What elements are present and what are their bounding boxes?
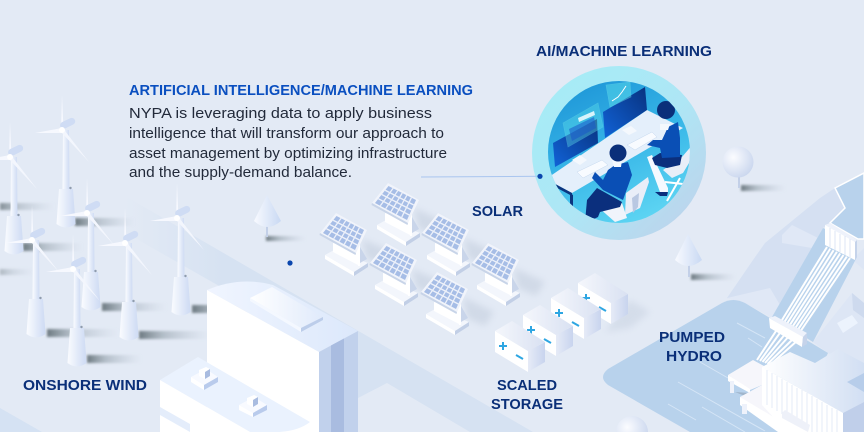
wind turbine 4 — [98, 208, 152, 340]
right mountains — [813, 293, 864, 372]
turbine shadows — [0, 203, 262, 363]
wind turbine 7 — [46, 234, 100, 366]
monitor right — [603, 87, 647, 138]
panel: solar array — [320, 183, 545, 335]
lower platforms — [728, 360, 820, 432]
tree: cone — [254, 195, 306, 241]
office scene — [546, 82, 694, 222]
solar shadows — [362, 208, 545, 326]
solar panel — [372, 183, 420, 246]
penstock channel — [772, 228, 857, 342]
solar panel — [472, 243, 520, 306]
lake — [603, 300, 828, 432]
marker dot — [287, 260, 293, 266]
panel: AI illustration circle — [532, 66, 706, 240]
inner circle — [548, 81, 690, 223]
tree: round bottom — [616, 416, 648, 432]
panel: onshore wind farm — [0, 95, 262, 366]
label: pumped hydro — [659, 329, 725, 365]
outer circle — [532, 66, 706, 240]
battery 4 — [578, 273, 628, 324]
monitor left — [553, 119, 598, 167]
person 1 — [585, 144, 632, 222]
battery 2 — [523, 305, 573, 356]
powerhouse — [762, 349, 864, 432]
heading: artificial intelligence: ARTIFICIAL INTELLIGENCE/MACHINE LEARNING — [129, 83, 473, 99]
person 2 — [647, 101, 682, 196]
panel: scaled storage batteries — [495, 273, 650, 372]
person 1 chair — [598, 177, 649, 222]
body text — [129, 105, 447, 181]
connector line — [421, 174, 543, 179]
rooftop unit — [239, 395, 267, 417]
wind turbine 2 — [0, 122, 37, 254]
label: AI/machine learning: AI/MACHINE LEARNING — [536, 43, 712, 60]
label: scaled storage: SCALED — [497, 377, 557, 394]
keyboards — [577, 160, 608, 178]
low building — [160, 357, 310, 432]
battery shadow — [605, 300, 650, 332]
hologram right — [606, 82, 631, 107]
label: pumped hydro: HYDRO — [666, 348, 722, 365]
solar panel — [422, 213, 470, 276]
desk — [552, 110, 683, 206]
panel: pumped hydro — [603, 173, 864, 432]
wind turbine 5 — [150, 183, 204, 316]
label: onshore wind: ONSHORE WIND — [23, 377, 147, 394]
tree: cone right — [675, 234, 736, 280]
person 2 chair — [663, 148, 690, 202]
body text: asset management by optimizing infrastructure — [129, 145, 447, 162]
label: scaled storage — [491, 377, 563, 413]
tall building — [207, 281, 358, 432]
solar panel — [370, 243, 418, 306]
wind turbine 1 — [35, 95, 89, 228]
tree: round — [722, 146, 786, 191]
label: pumped hydro: PUMPED — [659, 329, 725, 346]
solar panel — [420, 272, 469, 335]
battery 1 — [495, 321, 545, 372]
solar panel — [320, 213, 368, 276]
water ripples — [668, 323, 765, 432]
label: solar: SOLAR — [472, 203, 523, 220]
left mountains — [727, 188, 845, 317]
rooftop unit — [191, 367, 218, 390]
penstock pipes — [757, 247, 850, 365]
diagonal ground band — [125, 196, 533, 432]
body text: intelligence that will transform our approach to — [129, 125, 444, 142]
upper reservoir — [830, 173, 864, 239]
body text: and the supply-demand balance. — [129, 164, 352, 181]
panel: city buildings — [160, 281, 358, 432]
mid gate — [769, 316, 807, 347]
label: scaled storage: STORAGE — [491, 396, 563, 413]
wind turbine 3 — [60, 178, 114, 310]
upper gate — [825, 223, 857, 260]
wind turbine 6 — [5, 205, 59, 338]
hologram left — [563, 103, 603, 147]
body text: NYPA is leveraging data to apply business — [129, 105, 432, 122]
battery 3 — [551, 288, 601, 339]
